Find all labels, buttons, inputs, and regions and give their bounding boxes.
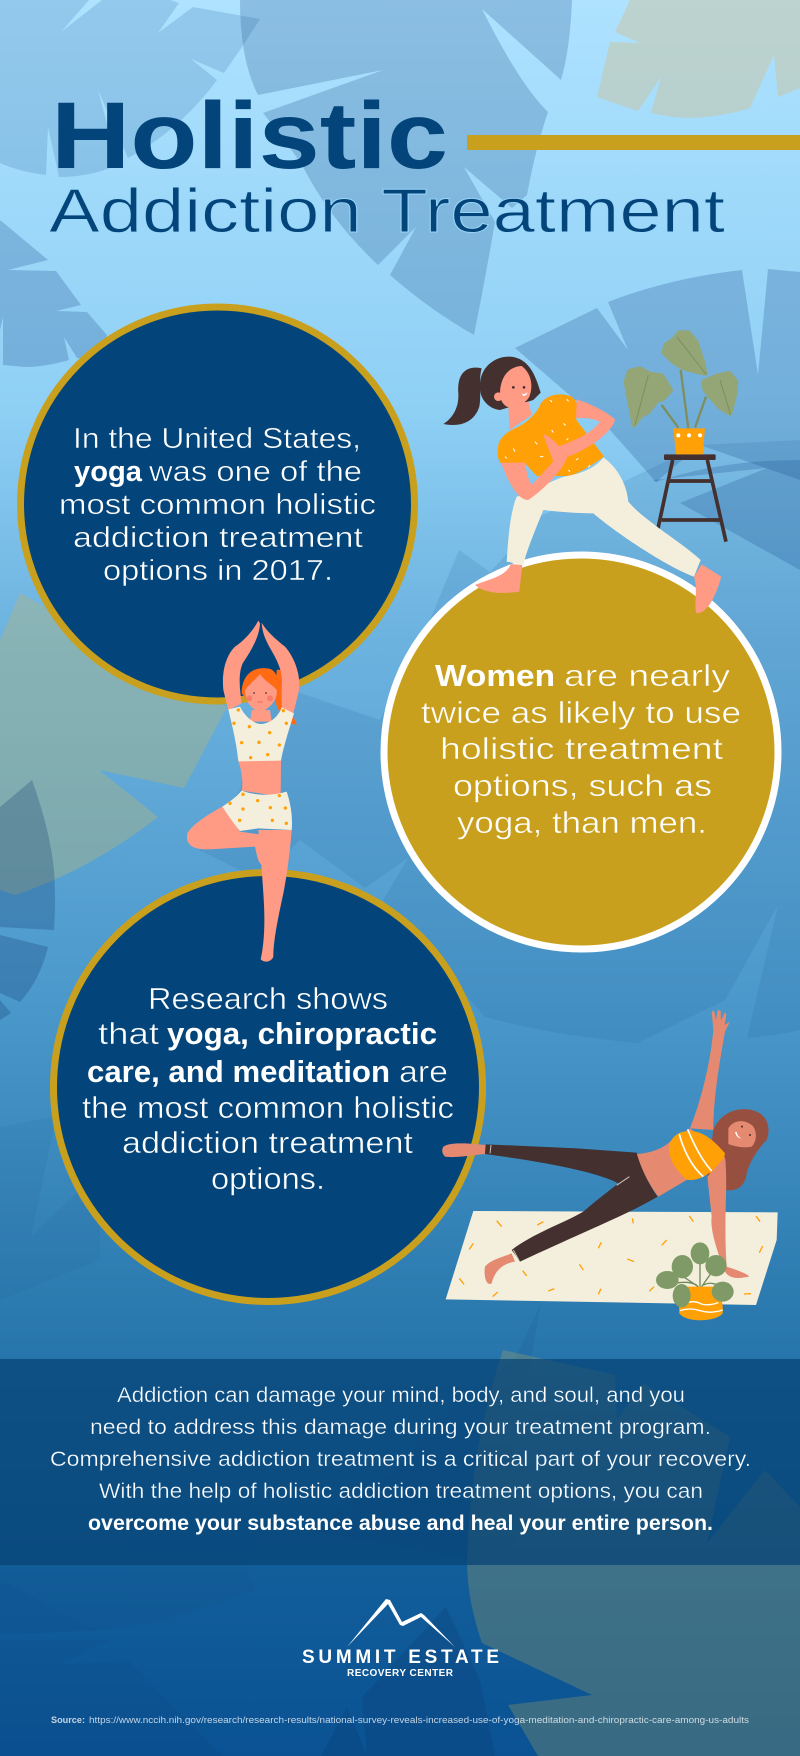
source line: Source: [51, 1715, 85, 1725]
panel: closing message band [0, 1359, 800, 1565]
logo: Summit Estate Recovery Center [302, 1599, 499, 1679]
logo: Summit Estate Recovery Center: SUMMIT ESTATE [302, 1647, 499, 1668]
panel: circle women statistic: holistic treatment [440, 731, 723, 766]
panel: circle women statistic: yoga, than men. [457, 805, 707, 840]
panel: circle yoga statistic: most common holistic [59, 489, 376, 521]
panel: circle women statistic: are nearly [564, 658, 731, 693]
panel: circle yoga statistic: options in 2017. [103, 555, 333, 587]
illustration: small potted plant on mat [656, 1242, 734, 1320]
panel: circle research: Research shows [148, 981, 388, 1016]
title accent bar [467, 135, 800, 150]
panel: closing message band: overcome your substance abuse and heal your entire person. [88, 1512, 713, 1535]
panel: circle yoga statistic: In the United States, [73, 423, 361, 455]
panel: closing message band: need to address this damage during your treatment program. [90, 1416, 711, 1439]
panel: circle research [54, 872, 482, 1302]
illustration: woman in tree pose [187, 621, 299, 962]
panel: closing message band: Comprehensive addiction treatment is a critical part of your recovery. [50, 1448, 751, 1471]
panel: closing message band: With the help of holistic addiction treatment options, you can [99, 1480, 703, 1503]
panel: circle women statistic: Women [435, 658, 555, 693]
illustration: plant on stool [626, 333, 736, 542]
panel: circle women statistic: options, such as [453, 768, 712, 803]
panel: circle research: care, and meditation [87, 1054, 390, 1089]
illustration: woman in lunge pose [443, 357, 721, 613]
panel: circle yoga statistic: was one of the [148, 456, 362, 488]
title: Holistic [51, 83, 448, 189]
panel: circle yoga statistic: yoga [74, 456, 143, 488]
illustration: woman in side plank on mat [442, 1010, 778, 1305]
panel: circle yoga statistic: addiction treatment [73, 522, 363, 554]
logo: Summit Estate Recovery Center: RECOVERY CENTER [347, 1668, 454, 1679]
panel: circle research: are [399, 1054, 448, 1089]
panel: circle women statistic [384, 555, 778, 949]
panel: circle women statistic: twice as likely to use [421, 695, 741, 730]
source line: https://www.nccih.nih.gov/research/research-results/national-survey-reveals-increased-use-of-yoga-meditation-and-chiropractic-care-among-us-adults [89, 1715, 750, 1725]
title [49, 83, 725, 246]
panel: circle research: addiction treatment [122, 1125, 413, 1160]
panel: circle yoga statistic [20, 307, 414, 701]
panel: circle research: options. [211, 1161, 325, 1196]
panel: circle research: the most common holistic [82, 1090, 454, 1125]
panel: closing message band: Addiction can damage your mind, body, and soul, and you [117, 1384, 685, 1407]
panel: circle research: yoga, chiropractic [167, 1016, 437, 1051]
panel: circle research: that [98, 1016, 159, 1051]
title: Addiction Treatment [49, 177, 725, 246]
